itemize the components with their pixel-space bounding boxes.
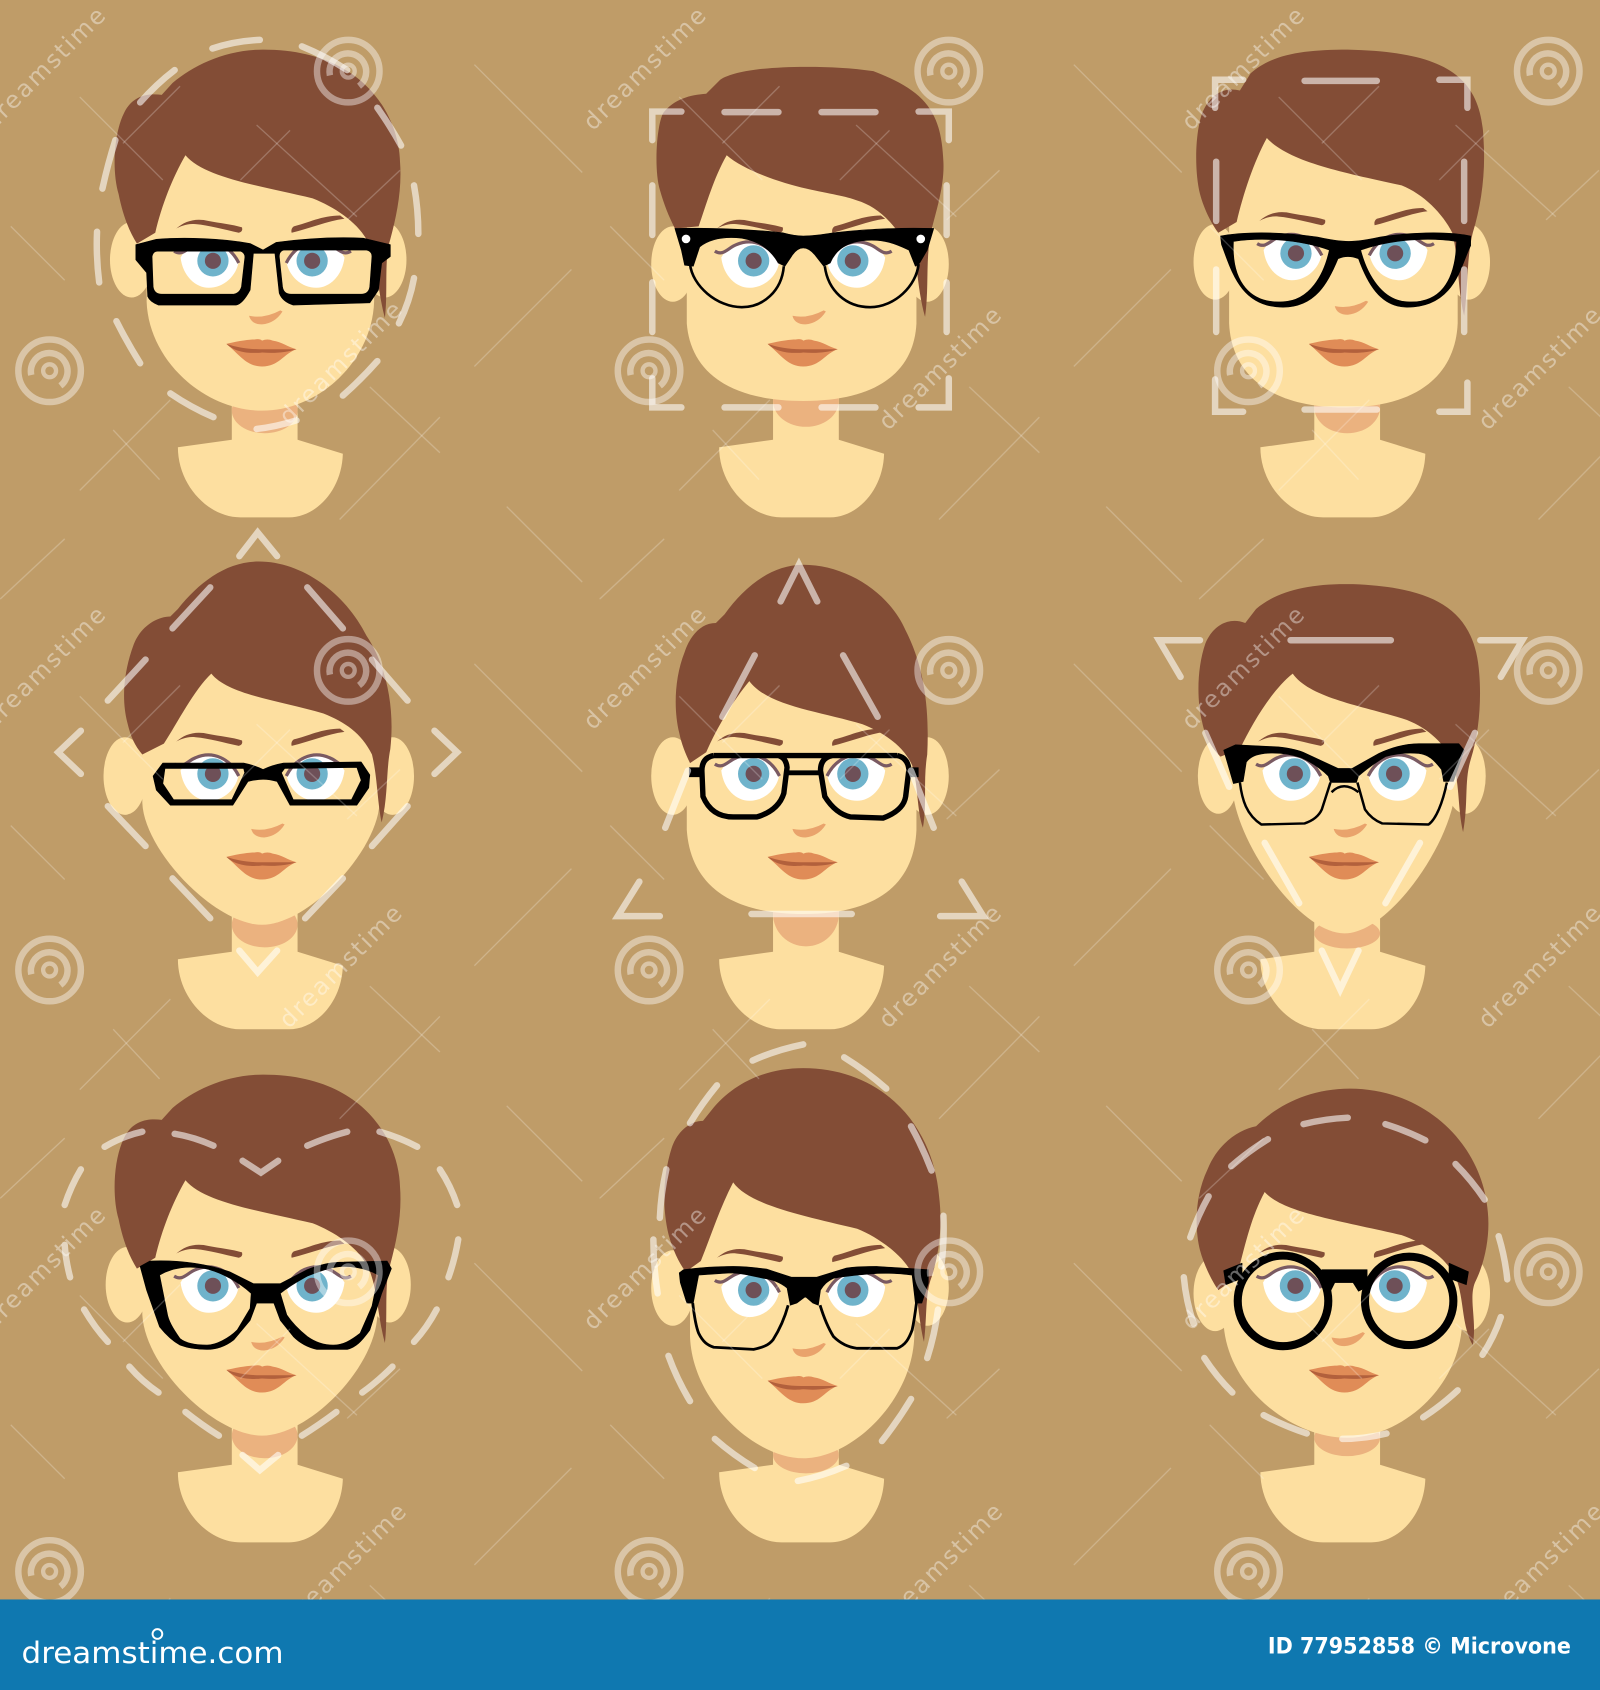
shape guide: inverted triangle dashes <box>1159 640 1522 989</box>
glasses: rectangular <box>136 238 390 305</box>
glasses: small rectangular <box>153 762 370 805</box>
glasses: browline trapezoid <box>679 1266 928 1349</box>
face: inverted triangle with cat-eye browline glasses <box>1159 584 1522 1029</box>
face: triangle with double-bridge glasses <box>618 565 983 1029</box>
watermark: diagonal text: dreamstime <box>273 899 408 1034</box>
glasses: double bridge <box>689 756 919 818</box>
shape guide: oval dashes <box>97 40 418 429</box>
face: oblong with browline glasses <box>651 1044 949 1542</box>
footer logo mark <box>153 1629 162 1639</box>
shape guide: oblong dashes <box>653 1044 944 1481</box>
watermark: diagonal text: dreamstime <box>577 2 712 136</box>
watermark: diagonal text: dreamstime <box>873 899 1007 1034</box>
face: diamond with small rectangular glasses <box>58 532 457 1029</box>
glasses: cat-eye browline <box>1224 744 1464 825</box>
shape guide: heart dashes <box>65 1132 458 1470</box>
face: oval with rectangular glasses <box>97 40 418 517</box>
shape guide: rectangle dashes <box>1215 80 1467 412</box>
shape guide: triangle dashes <box>618 565 983 916</box>
watermark: diagonal text: dreamstime <box>874 1498 1008 1632</box>
watermark: diagonal text: dreamstime <box>278 1498 412 1632</box>
watermark: diagonal text: dreamstime <box>1176 601 1310 735</box>
watermark: diagonal text: dreamstime <box>577 1201 712 1335</box>
face: rectangle with rounded wayfarer glasses <box>1194 50 1490 517</box>
glasses: thick round <box>1224 1256 1468 1346</box>
glasses: thick cat-eye <box>140 1261 391 1349</box>
footer logo text: dreamstime.com <box>22 1636 284 1670</box>
face: square with browline glasses <box>651 67 949 517</box>
footer band <box>0 1599 1600 1690</box>
face: round with round glasses <box>1184 1089 1507 1542</box>
shape guide: square dashes <box>652 112 949 407</box>
glasses: rounded wayfarer <box>1220 233 1471 307</box>
shape guide: diamond dashes <box>58 532 457 972</box>
watermark: diagonal text: dreamstime <box>873 301 1007 435</box>
shape guide: round dashes <box>1184 1118 1507 1439</box>
watermark: diagonal text: dreamstime <box>577 601 712 735</box>
face: heart with cat-eye glasses <box>65 1075 458 1542</box>
footer credit: ID 77952858 © Microvone <box>1268 1633 1571 1659</box>
watermark: diagonal text: dreamstime <box>273 296 408 430</box>
glasses: browline <box>675 228 934 307</box>
watermark: diagonal text: dreamstime <box>1176 1201 1310 1335</box>
watermark: diagonal text: dreamstime <box>1176 2 1310 136</box>
